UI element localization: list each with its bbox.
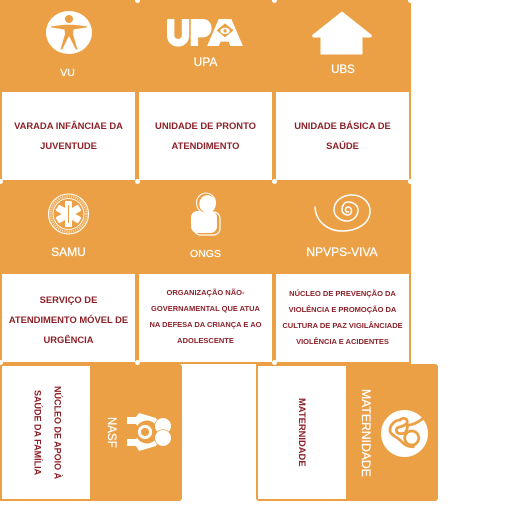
- text: UPA description: ATENDIMENTO: [172, 140, 239, 151]
- label: VU: VU: [60, 67, 75, 79]
- text: ONGS description: GOVERNAMENTAL QUE ATUA: [151, 304, 260, 313]
- icon: ONGS person: [191, 192, 221, 236]
- icon: UPA logo: [167, 19, 243, 46]
- text: SAMU description: URGÊNCIA: [43, 334, 94, 344]
- label: MATERNIDADE: MATERNIDADE: [359, 389, 373, 476]
- panel: VU: [2, 11, 135, 180]
- panel: MATERNIDADE: [256, 364, 438, 501]
- icon: spiral: [314, 194, 371, 232]
- text: UPA description: UNIDADE DE PRONTO: [155, 120, 256, 131]
- text: NPVPS-VIVA description: VIOLÊNCIA E PROMOÇÃO DA: [289, 305, 396, 314]
- icon: UBS house: [312, 12, 372, 54]
- text: NPVPS-VIVA description: NÚCLEO DE PREVENÇÃO DA: [289, 289, 396, 298]
- panel: NPVPS-VIVA: [276, 194, 409, 362]
- label: UBS: UBS: [331, 64, 355, 76]
- label: NPVPS-VIVA: NPVPS-VIVA: [306, 245, 378, 259]
- text: NPVPS-VIVA description: CULTURA DE PAZ VIGILÂNCIADE: [282, 321, 403, 330]
- text: SAMU description: [2, 274, 135, 362]
- panel: ONGS: [139, 192, 272, 362]
- icon: baby in circle: [381, 410, 428, 457]
- label: SAMU: SAMU: [51, 245, 86, 259]
- text: ONGS description: ADOLESCENTE: [177, 336, 234, 345]
- text: VU description: VARADA INFÂNCIAE DA: [14, 120, 123, 131]
- panel: UBS: [276, 12, 409, 180]
- panel: orange backdrop for top two rows: [0, 0, 411, 364]
- text: SAMU description: SERVIÇO DE: [40, 294, 97, 304]
- panel: UPA: [139, 19, 272, 180]
- text: VU description: JUVENTUDE: [40, 140, 97, 151]
- text: MATERNIDADE description: [258, 366, 346, 499]
- text: VU description: [2, 92, 135, 180]
- text: UBS description: UNIDADE BÁSICA DE: [294, 120, 391, 131]
- text: NASF description: NÚCLEO DE APOIO À: [52, 386, 62, 479]
- icon: SAMU emblem: [48, 194, 90, 234]
- icon: NASF family: [127, 413, 171, 451]
- text: UBS description: [276, 92, 409, 180]
- text: NASF description: SAÚDE DA FAMÍLIA: [32, 390, 42, 475]
- label: UPA: UPA: [194, 55, 217, 69]
- panel: SAMU: [2, 194, 135, 362]
- label: NASF: NASF: [105, 417, 117, 448]
- text: NPVPS-VIVA description: [276, 274, 409, 362]
- label: ONGS: ONGS: [190, 248, 221, 260]
- text: NASF description: [2, 366, 90, 499]
- icon: VU person in circle: [46, 11, 92, 54]
- text: UPA description: [139, 92, 272, 180]
- text: MATERNIDADE description: MATERNIDADE: [297, 398, 308, 467]
- text: UBS description: SAÚDE: [326, 140, 359, 151]
- text: ONGS description: [139, 274, 272, 362]
- text: ONGS description: ORGANIZAÇÃO NÃO-: [167, 288, 244, 297]
- text: SAMU description: ATENDIMENTO MÓVEL DE: [9, 314, 128, 324]
- panel: NASF: [0, 364, 182, 501]
- text: ONGS description: NA DEFESA DA CRIANÇA E AO: [150, 320, 261, 329]
- text: NPVPS-VIVA description: VIOLÊNCIA E ACIDENTES: [296, 337, 389, 346]
